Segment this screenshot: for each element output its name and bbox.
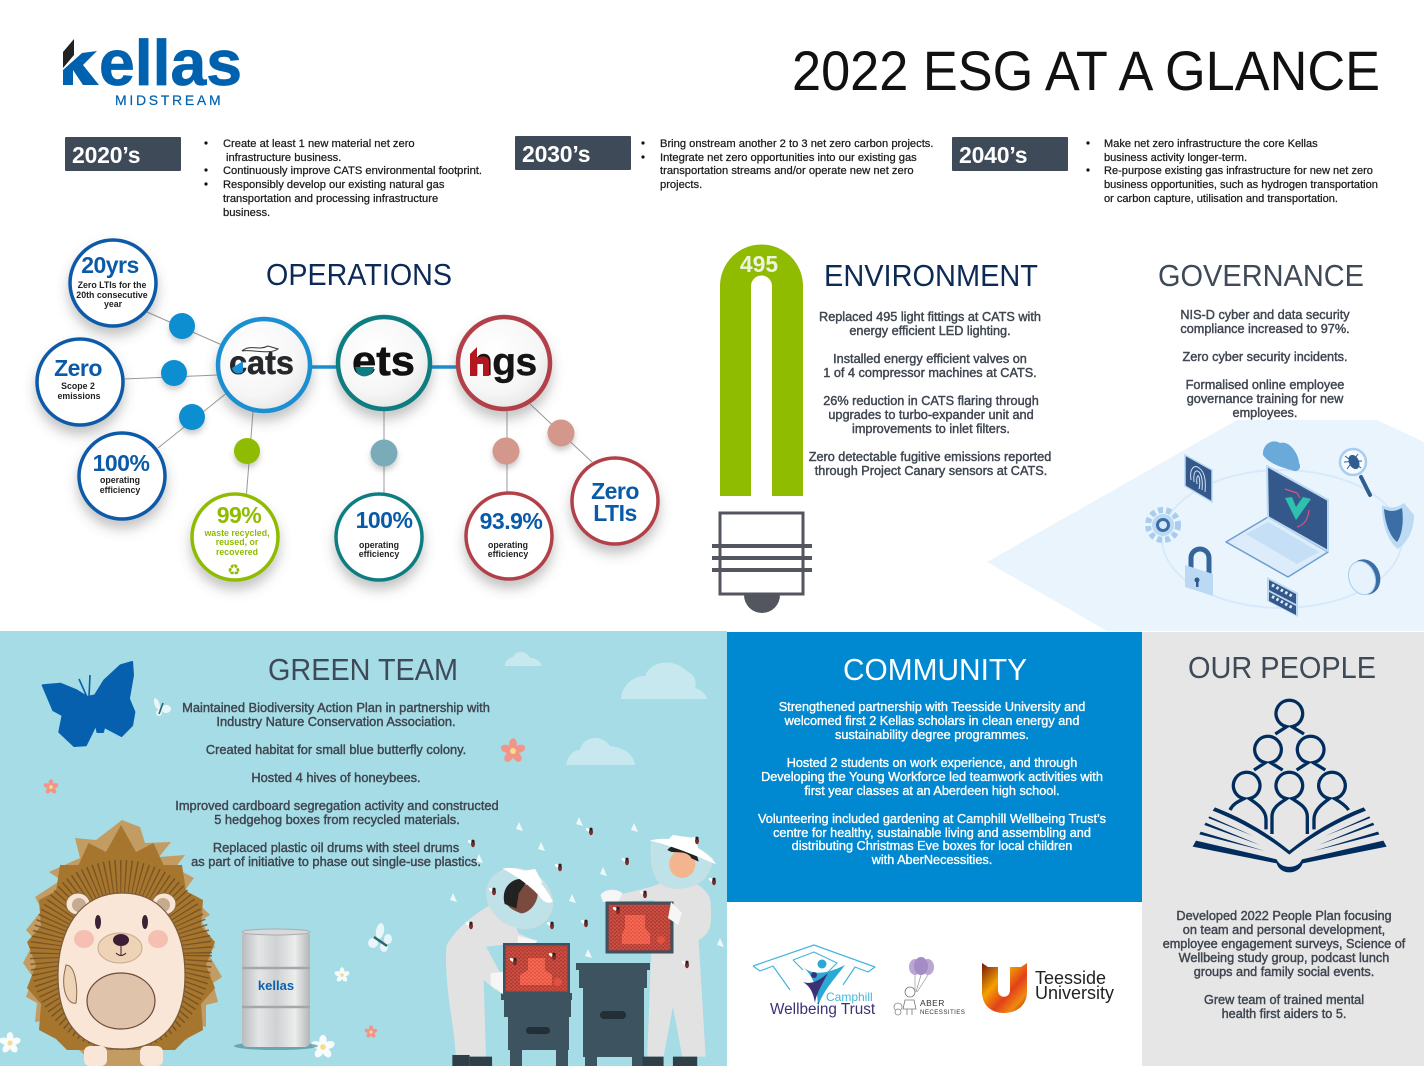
text block: community: Volunteering included gardening at Camphill Wellbeing Trust’s — [758, 812, 1106, 826]
icon: fingerprint — [1185, 455, 1212, 502]
panel: 2030's goals: transportation streams and/or operate new net zero — [660, 165, 914, 177]
title: 2022 ESG AT A GLANCE — [792, 39, 1380, 102]
icon: light bulb with 495 fittings — [712, 244, 812, 613]
text block: green team: 5 hedgehog boxes from recycled materials. — [214, 812, 460, 827]
text block: green team: as part of initiative to phase out single-use plastics. — [191, 854, 481, 869]
panel: 2020's goals: Continuously improve CATS environmental footprint. — [223, 165, 482, 177]
text block: environment: Installed energy efficient valves on — [833, 352, 1027, 366]
panel: 2030's goals: 2030’s — [522, 141, 590, 167]
text block: community: with AberNecessities. — [871, 853, 992, 867]
left honeycomb frame — [504, 944, 569, 993]
logo: Teesside University: University — [1035, 983, 1114, 1003]
panel: 2030's goals: projects. — [660, 179, 702, 191]
text block: governance: NIS-D cyber and data security — [1180, 308, 1350, 322]
stat: 20yrs: 20th consecutive — [76, 290, 148, 300]
stat: ngs 93.9%: 93.9% — [480, 508, 542, 534]
stat: 20yrs: Zero LTIs for the — [78, 280, 146, 290]
illustration: steel oil drum — [234, 929, 318, 1050]
logo: Camphill Wellbeing Trust: Wellbeing Trust — [770, 1001, 876, 1018]
stat: ngs 93.9%: operating — [488, 540, 528, 550]
panel: 2040's goals — [952, 137, 1378, 205]
icon: padlock — [1185, 549, 1213, 596]
logo: Kellas Midstream: ellas — [99, 27, 242, 99]
text block: green team: Improved cardboard segregation activity and constructed — [175, 798, 499, 813]
text block: governance: Zero cyber security incidents. — [1182, 350, 1348, 364]
icon: dial — [1344, 555, 1385, 599]
logo: ngs — [458, 317, 550, 409]
logo: Aber Necessities: NECESSITIES — [920, 1009, 965, 1016]
panel: 2040's goals: 2040’s — [959, 142, 1027, 168]
heading: governance: GOVERNANCE — [1158, 258, 1364, 293]
stat: 99% recycled: recovered — [216, 547, 258, 557]
bees — [450, 817, 724, 968]
heading: operations: OPERATIONS — [266, 257, 452, 292]
text block: environment: energy efficient LED lighting. — [849, 324, 1011, 338]
text block: environment: 26% reduction in CATS flaring through — [823, 394, 1039, 408]
text block: our people: groups and family social events. — [1194, 965, 1374, 979]
icon: gear — [1148, 510, 1178, 540]
stat: 100% operating efficiency: operating — [100, 475, 140, 485]
text block: environment: upgrades to turbo-expander unit and — [828, 408, 1034, 422]
text block: environment: Zero detectable fugitive emissions reported — [809, 450, 1051, 464]
stat: ets 100%: operating — [359, 540, 399, 550]
text block: green team: Hosted 4 hives of honeybees. — [251, 770, 421, 785]
text block: our people: health first aiders to 5. — [1222, 1007, 1346, 1021]
stat: 20yrs — [70, 240, 156, 326]
icon: bug under magnifier — [1340, 449, 1370, 495]
text block: environment: improvements to inlet filters. — [852, 422, 1010, 436]
logo: ngs: ngs — [469, 341, 537, 384]
panel: 2020's goals: infrastructure business. — [226, 152, 341, 164]
text block: community: Hosted 2 students on work experience, and through — [787, 756, 1077, 770]
text block: environment: Replaced 495 light fittings at CATS with — [819, 310, 1041, 324]
stat: 100% operating efficiency — [79, 433, 165, 519]
stat: zero scope 2: emissions — [57, 391, 101, 401]
icon: small butterfly — [153, 698, 171, 716]
stat: 20yrs: 20yrs — [81, 252, 139, 278]
clouds — [505, 652, 707, 765]
heading: green team: GREEN TEAM — [268, 652, 458, 687]
text block: green team: Maintained Biodiversity Action Plan in partnership with — [182, 700, 490, 715]
right honeycomb frame — [607, 902, 682, 952]
stat: ets 100%: 100% — [356, 507, 412, 533]
panel: 2040's goals: or carbon capture, utilisation and transportation. — [1104, 193, 1338, 205]
icon: shield — [1382, 503, 1414, 549]
icons: flowers — [0, 738, 526, 1059]
chart: operations network — [37, 240, 658, 580]
logo: ets: ets — [352, 337, 415, 384]
text block: our people: Wellbeing study group, podcast lunch — [1179, 951, 1389, 965]
text block: our people — [1163, 909, 1406, 1021]
logo: cats — [218, 319, 310, 411]
text block: community: Developing the Young Workforce led teamwork activities with — [761, 770, 1103, 784]
stat: 99% recycled: reused, or — [216, 537, 259, 547]
text block: community: Strengthened partnership with Teesside University and — [779, 700, 1085, 714]
logo: Kellas Midstream: MIDSTREAM — [115, 92, 223, 108]
left beekeeper — [446, 863, 561, 1066]
stat: zero LTIs: Zero — [591, 478, 639, 504]
heading: our people: OUR PEOPLE — [1188, 650, 1376, 685]
logo: Camphill Wellbeing Trust: Camphill — [826, 990, 873, 1004]
panel: 2040's goals: business activity longer-term. — [1104, 152, 1247, 164]
panel: community — [727, 632, 1142, 902]
text block: environment: 1 of 4 compressor machines at CATS. — [823, 366, 1037, 380]
stat: 20yrs: year — [104, 299, 123, 309]
stat: zero LTIs: LTIs — [593, 500, 637, 526]
panel: 2020's goals: Responsibly develop our existing natural gas — [223, 179, 445, 191]
text block: community: sustainability degree programmes. — [835, 728, 1029, 742]
panel: 2020's goals: transportation and processing infrastructure — [223, 193, 438, 205]
stat: 100% operating efficiency: 100% — [93, 450, 149, 476]
panel: 2020's goals — [65, 137, 482, 219]
text block: governance — [1180, 308, 1350, 420]
text block: our people: on team and personal development, — [1183, 923, 1385, 937]
text block: governance: compliance increased to 97%. — [1180, 322, 1350, 336]
icon: light bulb with 495 fittings: 495 — [740, 251, 778, 277]
stat: ets 100% — [336, 494, 422, 580]
panel: 2030's goals: Integrate net zero opportunities into our existing gas — [660, 152, 917, 164]
logo: Camphill Wellbeing Trust — [753, 945, 876, 1018]
text block: our people: Grew team of trained mental — [1204, 993, 1364, 1007]
logo: Aber Necessities — [894, 957, 965, 1016]
right hive — [576, 963, 650, 1066]
left hive — [501, 993, 572, 1066]
panel: 2030's goals: Bring onstream another 2 to 3 net zero carbon projects. — [660, 138, 933, 150]
stat: 99% recycled: 99% — [217, 502, 261, 528]
text block: green team: Industry Nature Conservation Association. — [216, 714, 456, 729]
heading: community: COMMUNITY — [843, 652, 1027, 687]
icon: laptop — [1226, 466, 1328, 577]
panel: 2020's goals: business. — [223, 207, 270, 219]
text block: community: welcomed first 2 Kellas scholars in clean energy and — [784, 714, 1079, 728]
text block: community: distributing Christmas Eve boxes for local children — [792, 839, 1072, 853]
panel: 2020's goals: 2020’s — [72, 142, 140, 168]
stat: 100% operating efficiency: efficiency — [100, 485, 140, 495]
panel: 2030's goals — [515, 136, 933, 191]
stat: 99% recycled — [192, 494, 278, 580]
panel: our people — [1142, 632, 1424, 1066]
text block: community — [758, 700, 1106, 867]
text block: community: centre for healthy, sustainable living and assembling and — [773, 826, 1091, 840]
icon: cloud — [1263, 441, 1300, 471]
panel: green team — [0, 631, 727, 1066]
stat: ngs 93.9%: efficiency — [488, 549, 528, 559]
logo: ets — [338, 317, 430, 409]
logo: Teesside University: Teesside — [1035, 968, 1106, 988]
text block: environment — [809, 310, 1051, 478]
illustration: beekeepers and hives — [446, 817, 724, 1066]
stat: zero scope 2: Scope 2 — [61, 381, 95, 391]
text block: governance: Formalised online employee — [1186, 378, 1344, 392]
text block: governance: governance training for new — [1187, 392, 1344, 406]
panel: 2040's goals: business opportunities, such as hydrogen transportation — [1104, 179, 1378, 191]
panel: 2040's goals: Make net zero infrastructure the core Kellas — [1104, 138, 1318, 150]
panel: 2040's goals: Re-purpose existing gas infrastructure for new net zero — [1104, 165, 1373, 177]
stat: ets 100%: efficiency — [359, 549, 399, 559]
logo: Teesside University — [982, 963, 1114, 1013]
logo: Aber Necessities: ABER — [920, 998, 945, 1008]
logo: cats: cats — [229, 344, 294, 381]
right beekeeper — [600, 835, 713, 1066]
icon: pale blue butterfly — [368, 922, 392, 952]
stat: 99% recycled: waste recycled, — [203, 528, 270, 538]
text block: community: first year classes at an Aberdeen high school. — [804, 784, 1060, 798]
text block: environment: through Project Canary sensors at CATS. — [815, 464, 1047, 478]
text block: our people: employee engagement surveys, Science of — [1163, 937, 1406, 951]
stat: zero scope 2 — [37, 339, 123, 425]
text block: our people: Developed 2022 People Plan focusing — [1176, 909, 1392, 923]
text block: green team: Created habitat for small blue butterfly colony. — [206, 742, 466, 757]
stat: zero LTIs — [572, 458, 658, 544]
text block: green team — [175, 700, 499, 869]
icon: keypad — [1267, 577, 1298, 617]
text block: green team: Replaced plastic oil drums with steel drums — [213, 840, 459, 855]
illustration: steel oil drum: kellas — [258, 978, 294, 993]
text block: governance: employees. — [1233, 406, 1297, 420]
panel: cyber security illustration — [987, 420, 1424, 631]
icon: blue butterfly — [43, 662, 134, 746]
heading: environment: ENVIRONMENT — [824, 258, 1038, 293]
stat: zero scope 2: Zero — [54, 355, 102, 381]
stat: 99% recycled: ♻ — [227, 562, 241, 579]
stat: ngs 93.9% — [466, 493, 552, 579]
illustration: hedgehog — [23, 820, 222, 1066]
icon: people on open book — [1193, 700, 1387, 872]
panel: 2020's goals: Create at least 1 new material net zero — [223, 138, 415, 150]
